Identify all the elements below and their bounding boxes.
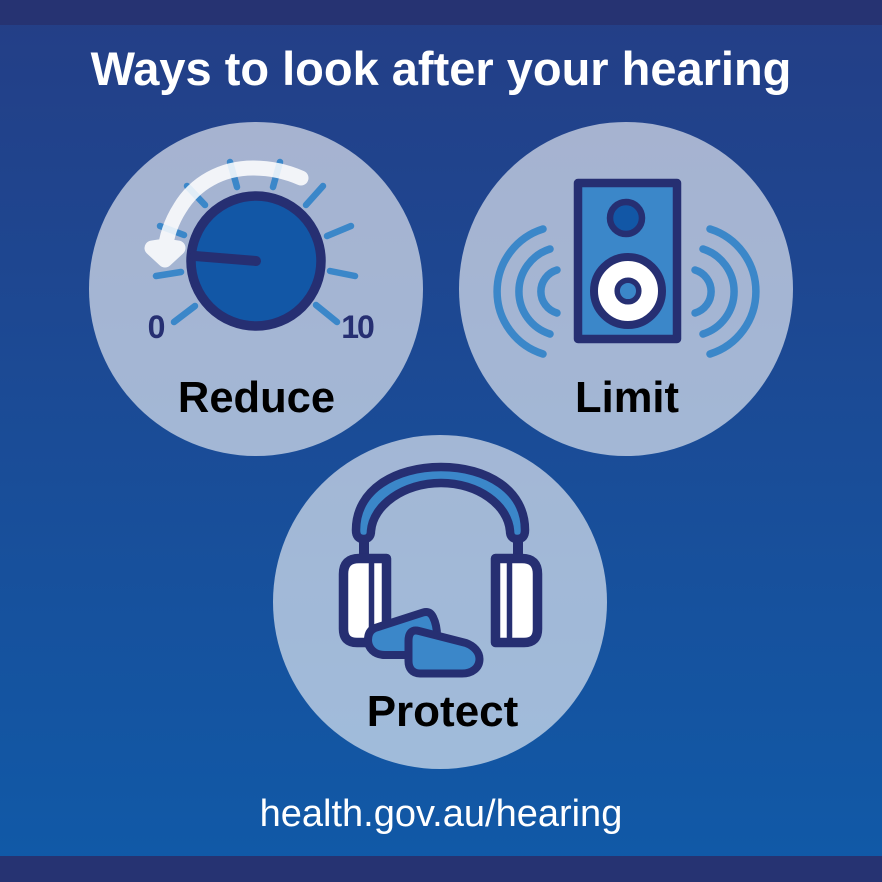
icon: speaker	[578, 183, 677, 339]
icon: sound waves right	[695, 229, 756, 354]
icon: sound waves left	[497, 229, 557, 354]
icon: volume dial ticks	[156, 162, 355, 322]
panel: limit	[459, 122, 793, 456]
icon: earplugs	[368, 612, 480, 674]
label: 0: 0	[148, 309, 165, 345]
panel: reduce	[89, 122, 423, 456]
heading: protect: Protect	[367, 687, 519, 736]
heading: reduce: Reduce	[178, 374, 335, 422]
arrow: turn down	[152, 168, 301, 260]
icon: earmuffs	[344, 467, 538, 643]
icon: volume dial knob	[191, 196, 321, 326]
heading: limit: Limit	[575, 374, 679, 422]
panel: protect	[273, 435, 607, 769]
url: health.gov.au/hearing	[260, 793, 622, 835]
label: 10: 10	[341, 309, 374, 345]
title: Ways to look after your hearing	[91, 42, 791, 95]
